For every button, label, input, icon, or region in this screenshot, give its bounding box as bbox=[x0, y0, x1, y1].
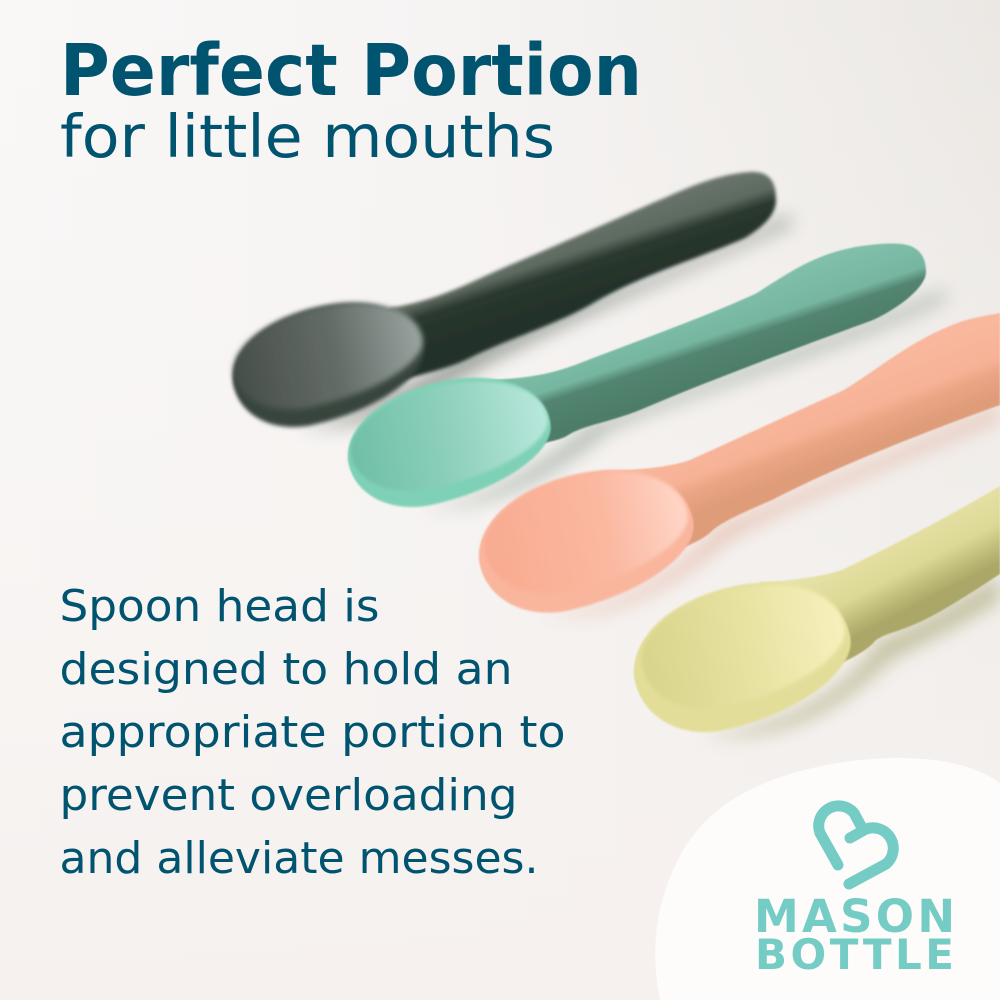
body text: designed to hold an bbox=[60, 644, 512, 695]
wordmark: MASON bbox=[754, 890, 955, 943]
body text: appropriate portion to bbox=[60, 707, 566, 758]
white logo blob bbox=[655, 758, 1000, 1000]
body text: prevent overloading bbox=[60, 770, 518, 821]
body text: Spoon head is bbox=[60, 581, 379, 632]
subheading: for little mouths: for little mouths bbox=[60, 102, 555, 171]
wordmark bbox=[754, 890, 955, 979]
body text: and alleviate messes. bbox=[60, 833, 538, 884]
spoon: yellow bbox=[622, 486, 1000, 744]
icon: heart B mark bbox=[819, 806, 893, 884]
spoon: teal green bbox=[337, 244, 945, 518]
heading: Perfect Portion: Perfect Portion bbox=[60, 29, 642, 112]
wordmark: BOTTLE bbox=[755, 930, 954, 979]
spoon: peach bbox=[467, 313, 1000, 624]
body text bbox=[60, 581, 566, 884]
title bbox=[60, 29, 642, 171]
spoon: dark green bbox=[222, 172, 790, 437]
logo: Mason Bottle bbox=[754, 806, 955, 979]
